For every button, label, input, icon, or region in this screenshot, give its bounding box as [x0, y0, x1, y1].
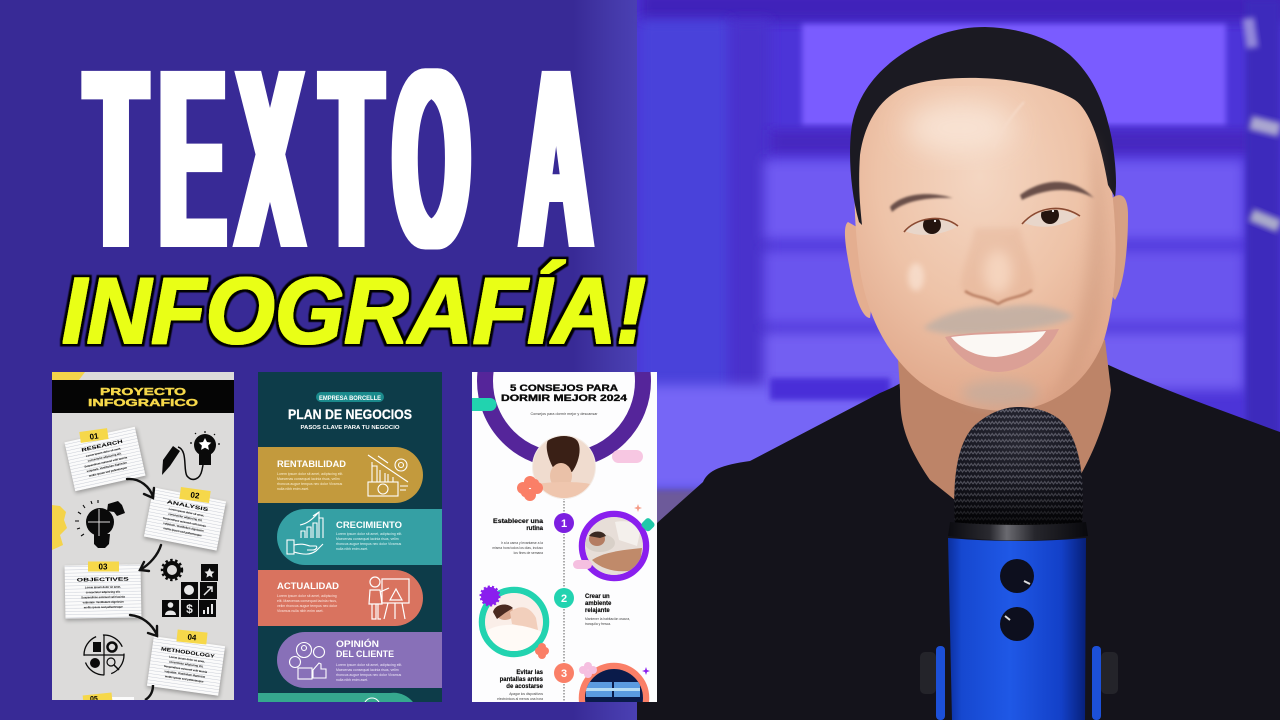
pink blob 2 — [573, 560, 592, 569]
note 04 methodology: Suspendisse euismod velit lacinia — [164, 664, 208, 674]
tag 01 — [79, 428, 109, 443]
shirt — [637, 360, 1280, 720]
arrow 4 — [145, 685, 153, 700]
yellow splash — [52, 505, 67, 550]
step 3 badge — [554, 663, 574, 683]
mic grille — [954, 407, 1083, 525]
mic collar — [948, 522, 1088, 540]
arrow 3 — [130, 615, 157, 636]
ear right — [1100, 195, 1128, 300]
band: actualidad: elit. Maecenas consequat lacinia risus, — [277, 599, 337, 603]
shaded side of face — [1054, 130, 1106, 398]
note 02 analysis: Suspendisse euismod velit lacinia — [163, 516, 207, 528]
coral sparkle — [634, 504, 642, 512]
title: INFOGRAFÍA!: INFOGRAFÍA! — [62, 258, 646, 363]
note 02 analysis: Lorem ipsum dolor sit amet, — [168, 507, 205, 518]
teal blob — [472, 398, 497, 411]
band: actualidad: velim rhoncus augue tempus nec dolor — [277, 604, 338, 608]
panel: plan de negocios — [258, 372, 442, 714]
arrow 1 — [127, 479, 154, 498]
coral flower — [517, 476, 543, 501]
step 1 text: Establecer una — [493, 519, 544, 525]
heading: 5 CONSEJOS PARA — [510, 383, 619, 393]
band: rentabilidad: RENTABILIDAD — [277, 459, 346, 470]
step 2 badge: 2 — [561, 593, 567, 605]
purple splat — [481, 587, 499, 605]
tag 04: 04 — [187, 633, 197, 642]
note 04 methodology: Lorem ipsum dolor sit amet, — [169, 655, 205, 664]
step 2 text: Mantener la habitación oscura, — [585, 617, 630, 621]
note 05 partial: 05 — [90, 696, 98, 703]
header band — [52, 380, 234, 413]
note 03 objectives: mollis ipsum sed pellentesque — [84, 605, 123, 609]
cheek shine — [908, 263, 924, 291]
timeline — [563, 498, 565, 702]
band: rentabilidad: Maecenas consequat lacinia risus, velim — [277, 477, 340, 481]
note 01 research: Suspendisse euismod velit lacinia — [84, 455, 128, 469]
pink flower — [579, 662, 597, 678]
step 2 text: ambiente — [585, 601, 612, 607]
band: partial green — [258, 692, 413, 702]
band: crecimiento: rhoncus augue tempus nec dolor Vivamus — [336, 542, 402, 546]
band: actualidad — [258, 570, 423, 626]
note 03 objectives — [65, 564, 142, 621]
note 02 analysis: ANALYSIS — [166, 499, 210, 513]
icon: falling costs — [368, 455, 408, 496]
step 2 text: Crear un — [585, 594, 610, 600]
note 02 analysis: vulputate. Vestibulum dignissim — [163, 521, 205, 533]
band: rentabilidad — [258, 447, 423, 503]
step 1 text: los fines de semana — [514, 551, 543, 555]
step 3 text — [497, 670, 544, 701]
smile: teeth — [951, 331, 1046, 357]
tag 01: 01 — [89, 431, 100, 442]
eyebrow right — [1020, 182, 1094, 200]
note 05 partial — [82, 692, 134, 700]
mic side stand right — [1092, 646, 1118, 720]
note 04 methodology: mollis ipsum sed pellentesque — [165, 674, 204, 684]
stubble — [923, 305, 1074, 335]
band: actualidad: Vivamus nulla nibh enim aset. — [277, 609, 323, 613]
band: crecimiento — [277, 509, 442, 565]
badge: EMPRESA BORCELLE — [319, 396, 381, 402]
band: crecimiento: Lorem ipsum dolor sit amet, adipiscing elit. — [336, 532, 402, 536]
step 1 text — [492, 519, 544, 555]
band: opinion del cliente: rhoncus augue tempus nec dolor Vivamus — [336, 673, 402, 677]
tag 03: 03 — [99, 562, 108, 572]
badge — [316, 392, 384, 402]
note 03 objectives: OBJECTIVES — [77, 577, 130, 583]
icon: pencil and lightbulb — [162, 431, 220, 479]
icon: block grid — [162, 564, 218, 617]
band: rentabilidad: nulla nibh enim aset. — [277, 487, 309, 491]
note 01 research: vulputate. Vestibulum dignissim — [86, 460, 128, 473]
note 04 methodology: vulputate. Vestibulum dignissim — [164, 669, 206, 679]
band: opinion del cliente: DEL CLIENTE — [336, 649, 394, 659]
tag 02 — [179, 487, 211, 503]
band: crecimiento: CRECIMIENTO — [336, 520, 402, 530]
note 02 analysis — [144, 487, 227, 553]
face — [855, 76, 1116, 411]
step 3 text: Apagar los dispositivos — [509, 692, 543, 696]
heading: INFOGRAFICO — [88, 398, 198, 409]
step 2 text: tranquila y fresca. — [585, 622, 611, 626]
band: opinion del cliente: nulla nibh enim aset. — [336, 678, 368, 682]
step 1 text: misma hora todos los días, incluso — [492, 546, 543, 550]
eye right — [1022, 206, 1080, 227]
step 3 text: Evitar las — [516, 670, 544, 676]
band: opinion del cliente: Lorem ipsum dolor sit amet, adipiscing elit. — [336, 663, 402, 667]
heading: PLAN DE NEGOCIOS — [288, 407, 412, 422]
step 1 text: rutina — [526, 526, 544, 532]
band: crecimiento: Maecenas consequat lacinia risus, velim — [336, 537, 399, 541]
band: opinion del cliente: OPINIÓN — [336, 638, 379, 649]
arrow 2 — [140, 545, 161, 571]
band: crecimiento: nulla nibh enim aset. — [336, 547, 368, 551]
note 03 objectives: Lorem ipsum dolor sit amet, — [85, 585, 121, 589]
icon: growth hand — [287, 512, 323, 554]
mic body — [948, 538, 1086, 720]
person: presenter — [637, 27, 1280, 720]
pink blob — [612, 450, 643, 463]
band: rentabilidad: Lorem ipsum dolor sit amet, adipiscing elit. — [277, 472, 343, 476]
step 2 badge — [554, 588, 574, 608]
subheading: PASOS CLAVE PARA TU NEGOCIO — [300, 425, 400, 431]
title: TEXTO A: TEXTO A — [86, 17, 591, 303]
mic knob bottom — [1000, 607, 1034, 641]
note 01 research: RESEARCH — [81, 439, 124, 454]
tag 02: 02 — [190, 490, 201, 501]
step 3 text: pantallas antes — [500, 677, 544, 683]
icon: gear — [162, 560, 182, 580]
icon: process cycle — [84, 635, 124, 675]
tag 03 — [88, 562, 119, 572]
step 1 text: Ir a la cama y levantarse a la — [501, 541, 543, 545]
mic side stand left — [920, 646, 945, 720]
panel: 5 consejos — [472, 372, 657, 702]
step 3 text: electrónicos al menos una hora — [497, 697, 543, 701]
step 2 text — [585, 594, 630, 626]
purple sparkle — [642, 667, 650, 675]
note 01 research — [64, 427, 147, 493]
forehead scar — [993, 102, 1024, 148]
step 3 text: de acostarse — [506, 684, 544, 690]
band: opinion del cliente: Maecenas consequat lacinia risus, velim — [336, 668, 399, 672]
purple ring — [477, 372, 651, 462]
note 02 analysis: consectetur adipiscing elit. — [168, 512, 203, 522]
note 01 research: Lorem ipsum dolor sit amet, — [85, 446, 122, 458]
icon: teacher at board — [369, 577, 409, 619]
note 04 methodology: consectetur adipiscing elit. — [169, 660, 204, 668]
icon: puzzle bulb — [75, 500, 125, 548]
note 04 methodology: METHODOLOGY — [161, 646, 216, 660]
step 1 badge — [554, 513, 574, 533]
note 03 objectives: vulputate. Vestibulum dignissim — [83, 600, 124, 604]
chin stubble — [962, 380, 1038, 406]
band: rentabilidad: rhoncus augue tempus nec dolor Vivamus — [277, 482, 343, 486]
photo: woman resting — [532, 435, 596, 500]
eye left — [904, 216, 958, 235]
band: opinion del cliente — [277, 632, 442, 688]
note 03 objectives: consectetur adipiscing elit. — [86, 590, 121, 594]
step 3 badge: 3 — [561, 668, 567, 680]
heading: PROYECTO — [100, 387, 186, 398]
panel: proyecto infografico — [52, 372, 234, 703]
step 2 text: relajante — [585, 608, 610, 614]
step 2 photo — [482, 590, 546, 654]
forehead highlight — [905, 102, 1015, 154]
note 02 analysis: mollis ipsum sed pellentesque — [163, 526, 203, 538]
nose — [961, 228, 1034, 304]
hair — [850, 27, 1116, 225]
mic knob top — [1000, 559, 1034, 593]
step 1 badge: 1 — [561, 518, 567, 530]
band: actualidad: ACTUALIDAD — [277, 581, 339, 592]
icon: client rating — [290, 642, 326, 679]
step 1 photo — [582, 514, 646, 578]
microphone — [920, 407, 1118, 720]
note 03 objectives: Suspendisse euismod velit lacinia — [81, 595, 125, 599]
icon: block grid: $ — [186, 602, 193, 616]
subtitle: Consejos para dormir mejor y descansar — [530, 412, 598, 416]
note 01 research: mollis ipsum sed pellentesque — [88, 465, 128, 478]
neck — [897, 340, 1111, 500]
teal diamond — [640, 517, 656, 532]
band: actualidad: Lorem ipsum dolor sit amet, adipiscing — [277, 594, 337, 598]
ear left — [845, 222, 880, 318]
tag 04 — [176, 629, 208, 645]
note 01 research: consectetur adipiscing elit. — [87, 451, 122, 463]
smile: lips — [945, 329, 1059, 372]
eyebrow left — [890, 194, 953, 212]
note 04 methodology — [147, 636, 226, 698]
step 3 photo — [582, 666, 646, 720]
coral flower 2 — [535, 643, 549, 659]
heading: DORMIR MEJOR 2024 — [501, 393, 627, 403]
